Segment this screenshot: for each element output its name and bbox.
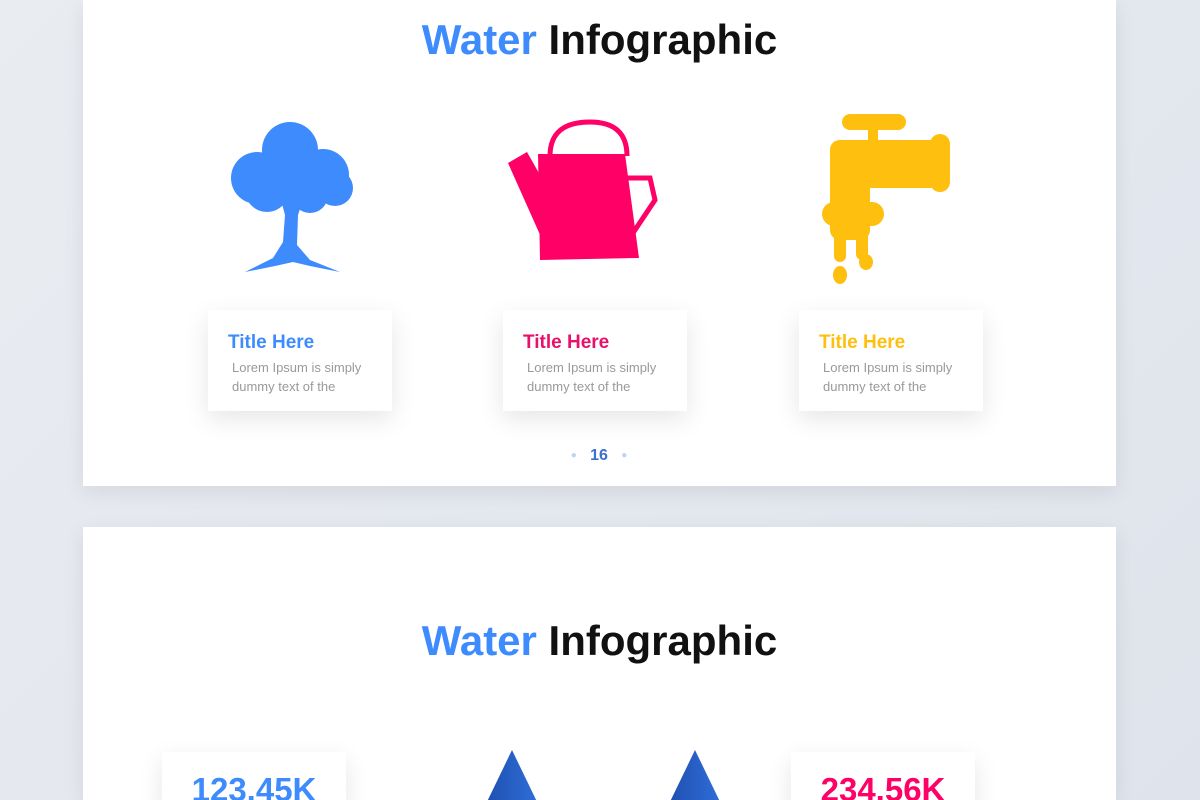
card 2: dummy text of the [527,379,630,394]
card 3 [799,310,983,411]
stat 1 [162,752,346,800]
card 3: Title Here [819,332,905,353]
icon: tree [231,122,353,272]
card 2: Title Here [523,332,609,353]
panel: slide 1 [83,0,1116,486]
card 2 [503,310,687,411]
title: Water Infographic [422,16,777,63]
icon: faucet [822,114,950,284]
page number: ● 16 ● [571,447,627,464]
title: Water Infographic [422,617,777,664]
card 2: Lorem Ipsum is simply [527,360,656,375]
drops [488,750,720,800]
stat 2 [791,752,975,800]
card 1: dummy text of the [232,379,335,394]
panel: slide 2 [83,527,1116,800]
card 3: dummy text of the [823,379,926,394]
card 1: Lorem Ipsum is simply [232,360,361,375]
card 1: Title Here [228,332,314,353]
card 3: Lorem Ipsum is simply [823,360,952,375]
icon: watering can [508,120,658,260]
card 1 [208,310,392,411]
